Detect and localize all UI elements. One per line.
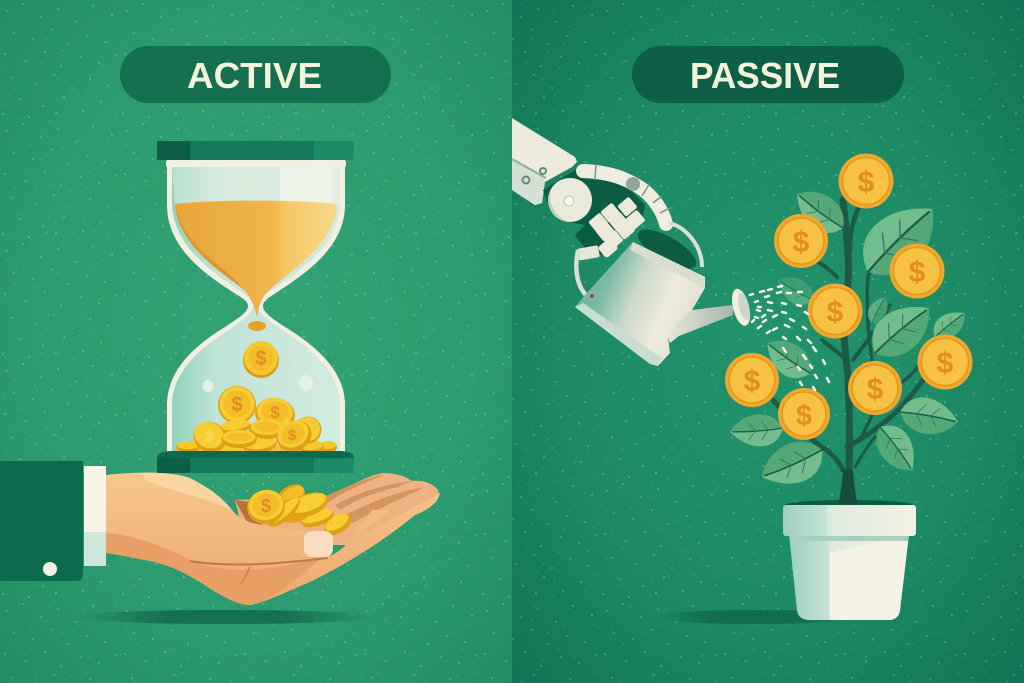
hourglass top cap: [157, 141, 354, 167]
finger joint plate: [626, 177, 640, 191]
coin: [838, 154, 894, 208]
coin: [808, 284, 862, 338]
heading: ACTIVE pill: ACTIVE: [187, 55, 322, 96]
spout: [668, 305, 733, 343]
tree trunk: [838, 470, 858, 508]
shadow under pot: [655, 610, 855, 624]
falling coin: $: [255, 348, 267, 370]
icon: watering can: [575, 222, 753, 366]
pot soil: [785, 500, 913, 510]
hourglass glass body: [167, 163, 345, 456]
panel: active background: [0, 0, 512, 683]
leaves: [729, 181, 972, 496]
coin: [725, 353, 779, 407]
button: [43, 562, 57, 576]
coin: [778, 388, 830, 440]
panel: passive background: [512, 0, 1024, 683]
fingers: [235, 473, 439, 545]
dark wrist: [543, 167, 645, 255]
coins on tree: [725, 154, 972, 440]
shirt cuff: [84, 466, 106, 566]
can body: [575, 242, 705, 366]
icon: hand holding coins: [0, 461, 440, 605]
falling sand drop: [248, 321, 266, 331]
upper sand: [175, 201, 337, 318]
coin pile in hourglass: $: [231, 394, 243, 416]
wrist joint: [548, 178, 592, 222]
can rim: [630, 242, 705, 288]
water spray: [750, 286, 829, 390]
heading: PASSIVE pill: [632, 46, 904, 103]
can opening: [632, 222, 702, 276]
coin: [918, 334, 972, 390]
icon: money tree stem and branches: [773, 200, 923, 503]
coin: [848, 361, 902, 415]
heading: PASSIVE pill: PASSIVE: [690, 55, 840, 96]
coins in palm: $: [261, 496, 271, 516]
coin: $: [796, 400, 812, 432]
palm and wrist: [106, 473, 440, 605]
coin pile in hourglass: [176, 386, 337, 458]
coin: $: [909, 256, 926, 289]
coin: $: [744, 365, 761, 398]
can handles: [668, 223, 702, 267]
fist: [577, 196, 646, 261]
upper finger: [583, 171, 666, 224]
coin: $: [937, 347, 954, 380]
coin: [890, 244, 944, 298]
coin: $: [827, 296, 844, 329]
icon: robot arm: [512, 118, 670, 261]
coin: $: [793, 226, 810, 259]
shadow under hand: [75, 610, 375, 624]
glass highlight: [172, 167, 340, 205]
pot rim: [783, 505, 916, 536]
thumbnail: [304, 531, 333, 557]
sprinkler rose: [729, 287, 753, 328]
suit sleeve: [0, 461, 83, 581]
coin: $: [858, 166, 875, 199]
coin: $: [867, 373, 884, 406]
coin pile in hourglass: $: [270, 403, 280, 422]
hourglass base: [157, 451, 354, 473]
coin pile in hourglass: $: [205, 428, 214, 445]
coins in palm: [244, 479, 355, 540]
pot body: [789, 534, 909, 620]
heading: ACTIVE pill: [120, 46, 391, 103]
falling coin: [243, 341, 279, 378]
icon: hourglass: [167, 163, 345, 458]
coin pile in hourglass: $: [288, 427, 297, 444]
coin: [774, 214, 828, 268]
icon: flower pot: [783, 470, 916, 620]
